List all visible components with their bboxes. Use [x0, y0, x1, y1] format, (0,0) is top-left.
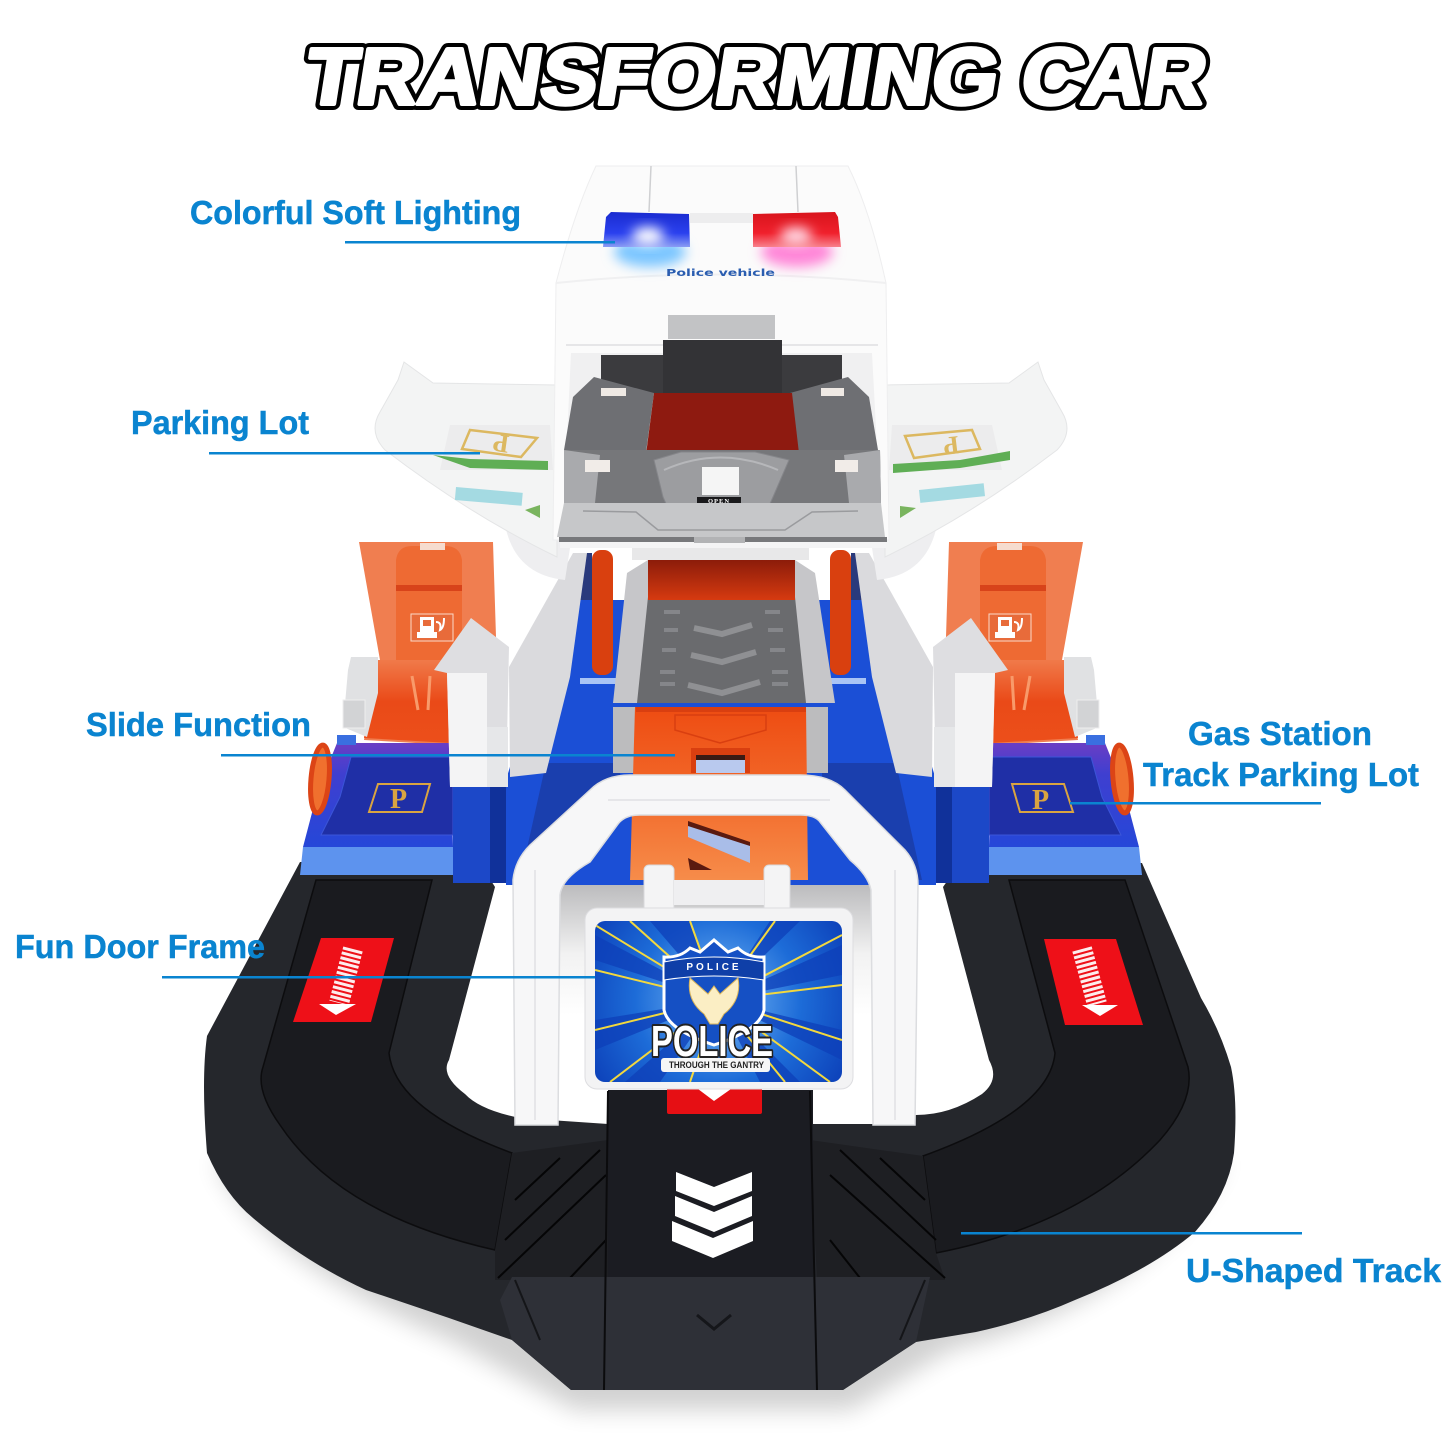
side wall — [509, 553, 587, 777]
side bin — [343, 657, 378, 737]
parking deck — [300, 735, 453, 875]
light glow — [614, 237, 833, 267]
console: OPEN — [708, 498, 730, 505]
under-gantry floor — [560, 880, 872, 1015]
gantry plate — [661, 1058, 770, 1072]
icon: small chevron — [697, 1315, 731, 1329]
blue light — [603, 212, 690, 247]
central blue base — [506, 553, 936, 885]
label: slide function: Slide Function — [86, 706, 311, 743]
gantry plate: THROUGH THE GANTRY — [669, 1060, 765, 1071]
left station — [300, 542, 587, 883]
wing lobes — [505, 525, 937, 580]
icon: right red arrow — [1044, 939, 1143, 1025]
police vehicle text: Police vehicle — [666, 268, 775, 279]
title: TRANSFORMING CAR — [299, 32, 1213, 122]
red light — [753, 212, 841, 247]
parking sign letters — [390, 784, 1049, 816]
front lip — [557, 503, 887, 560]
gas station panel — [359, 542, 498, 745]
label: gas station track parking lot: Gas Station — [1188, 715, 1372, 752]
icon: chevron stack — [672, 1172, 753, 1258]
right station — [855, 542, 1142, 883]
center hatch section — [495, 1090, 945, 1390]
orange arms — [592, 550, 851, 675]
red arrow under sign — [667, 1085, 762, 1114]
hood notch — [668, 315, 775, 339]
label: gas station track parking lot — [1070, 715, 1419, 804]
sign rays — [595, 921, 842, 1082]
title: TRANSFORMING CAR — [299, 32, 1213, 122]
right wing: P — [941, 430, 961, 461]
police sign — [585, 908, 853, 1089]
police car body — [553, 166, 889, 560]
fun door frame gantry — [513, 775, 918, 1125]
parking sign letters: P — [1032, 785, 1049, 816]
orange slide — [630, 707, 808, 880]
right wing — [885, 362, 1067, 557]
left wing: P — [491, 428, 511, 459]
label: u-shaped track: U-Shaped Track — [1186, 1252, 1442, 1289]
light flare — [632, 227, 812, 245]
track shadow — [215, 1160, 1225, 1410]
right lane — [923, 880, 1189, 1253]
white pillar — [434, 618, 509, 883]
label: fun door frame: Fun Door Frame — [15, 928, 265, 965]
icon: gas pump — [411, 614, 453, 641]
left wing — [375, 362, 557, 557]
parking sign letters: P — [390, 784, 407, 815]
police badge — [664, 940, 764, 1045]
u-shaped track — [204, 862, 1235, 1390]
label: gas station track parking lot: Track Parking Lot — [1143, 756, 1419, 793]
console — [654, 452, 789, 517]
cab interior — [564, 340, 881, 503]
orange handle — [308, 744, 332, 814]
slide ramp — [592, 550, 851, 880]
label: parking lot: Parking Lot — [131, 404, 309, 441]
hinges — [644, 865, 790, 912]
police badge: POLICE — [686, 962, 742, 973]
left lane — [261, 880, 512, 1250]
icon: left red arrow — [293, 938, 394, 1022]
police wordmark: POLICE — [651, 1017, 773, 1066]
label: colorful soft lighting: Colorful Soft Lighting — [190, 194, 521, 231]
eagle — [689, 978, 739, 1024]
